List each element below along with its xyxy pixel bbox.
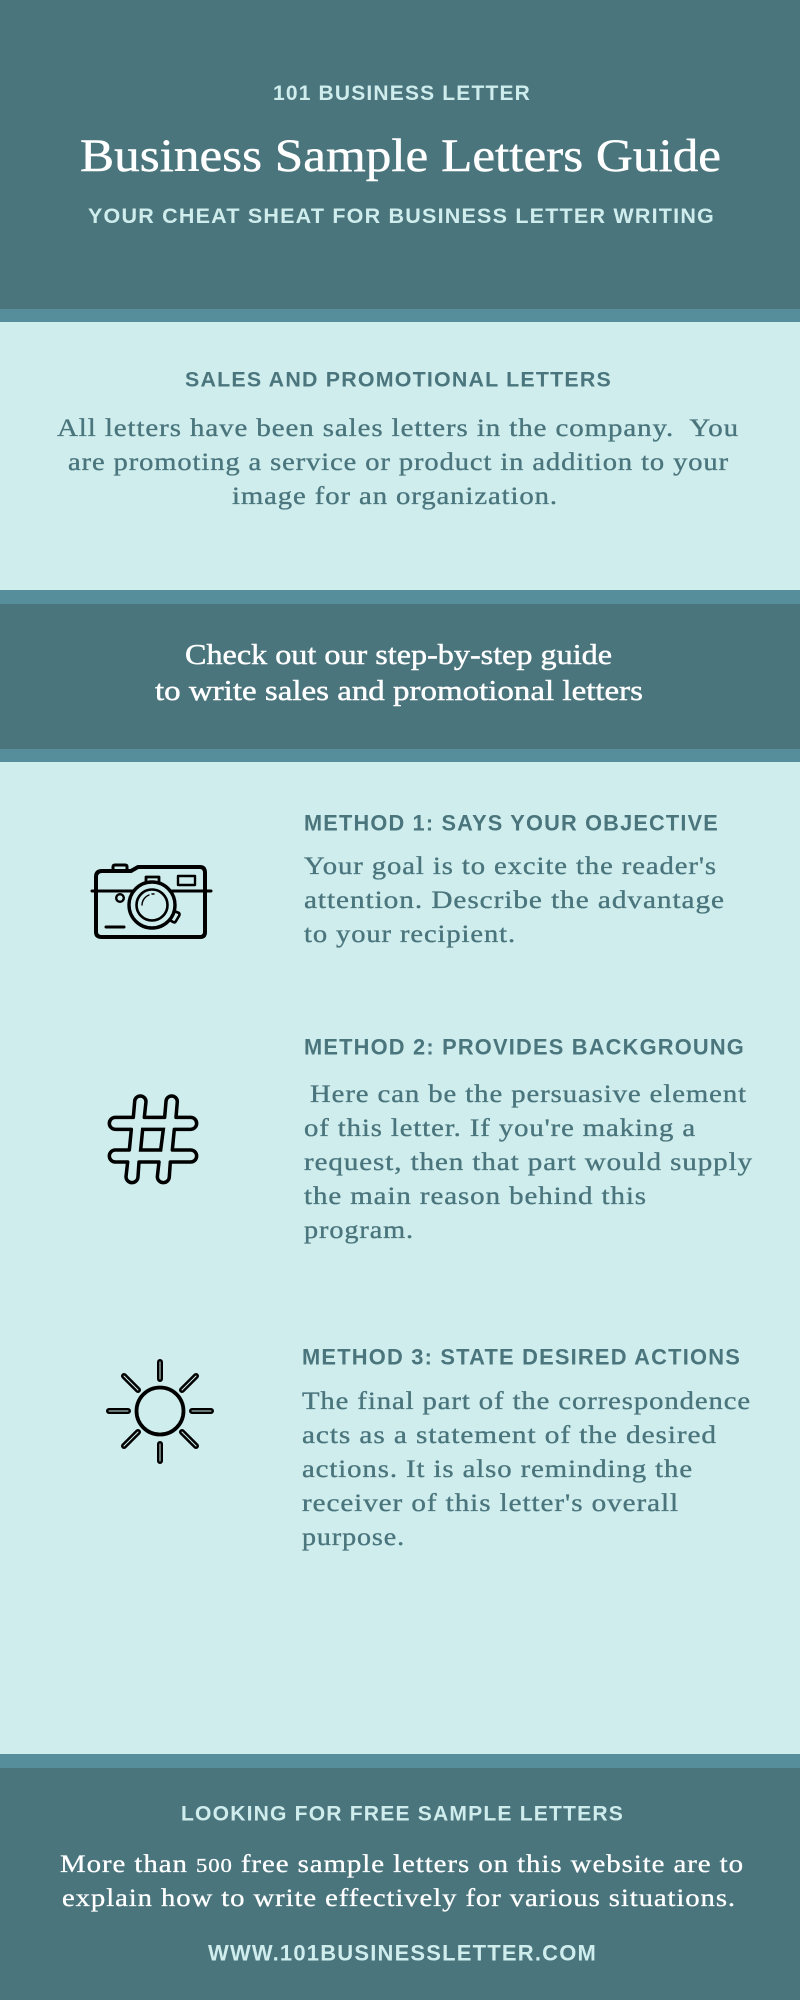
panel: header bbox=[0, 0, 800, 322]
section text: are promoting a service or product in addition to your bbox=[68, 447, 729, 476]
method 1 text: Your goal is to excite the reader's bbox=[304, 851, 717, 880]
section text: All letters have been sales letters in the company. You bbox=[57, 413, 739, 442]
section text: image for an organization. bbox=[232, 481, 558, 510]
footer text: explain how to write effectively for various situations. bbox=[62, 1883, 736, 1912]
icon: hash bbox=[109, 1096, 197, 1183]
method 2 text bbox=[304, 1079, 753, 1244]
footer text: More than 500 free sample letters on this website are to bbox=[60, 1849, 744, 1878]
footer heading: LOOKING FOR FREE SAMPLE LETTERS bbox=[181, 1802, 624, 1826]
method 1 text: attention. Describe the advantage bbox=[304, 885, 725, 914]
method 3 text: acts as a statement of the desired bbox=[302, 1420, 717, 1449]
method 1 text bbox=[304, 851, 725, 948]
call to action text: to write sales and promotional letters bbox=[155, 676, 643, 707]
section text bbox=[57, 413, 739, 510]
subtitle: YOUR CHEAT SHEAT FOR BUSINESS LETTER WRITING bbox=[88, 204, 715, 228]
brand label: 101 BUSINESS LETTER bbox=[273, 81, 531, 105]
method 3 text bbox=[302, 1386, 751, 1551]
panel: sales and promotional letters bbox=[0, 322, 800, 590]
method 2 text: of this letter. If you're making a bbox=[304, 1113, 696, 1142]
method 2 heading: METHOD 2: PROVIDES BACKGROUNG bbox=[304, 1034, 745, 1060]
method 3 heading: METHOD 3: STATE DESIRED ACTIONS bbox=[302, 1344, 741, 1370]
panel: methods bbox=[0, 762, 800, 1754]
icon: camera bbox=[92, 865, 211, 937]
method 3 text: The final part of the correspondence bbox=[302, 1386, 751, 1415]
call to action text: Check out our step-by-step guide bbox=[185, 640, 612, 671]
method 3 text: purpose. bbox=[302, 1522, 405, 1551]
method 3 text: actions. It is also reminding the bbox=[302, 1454, 693, 1483]
method 1 heading: METHOD 1: SAYS YOUR OBJECTIVE bbox=[304, 810, 719, 836]
method 3 text: receiver of this letter's overall bbox=[302, 1488, 679, 1517]
method 2 text: request, then that part would supply bbox=[304, 1147, 753, 1176]
method 2 text: the main reason behind this bbox=[304, 1181, 647, 1210]
footer text bbox=[60, 1849, 744, 1912]
panel: call to action bbox=[0, 590, 800, 762]
title: Business Sample Letters Guide bbox=[80, 130, 721, 182]
method 1 text: to your recipient. bbox=[304, 919, 516, 948]
call to action text bbox=[155, 640, 643, 707]
method 2 text: program. bbox=[304, 1215, 414, 1244]
icon: sun bbox=[109, 1362, 211, 1461]
section heading: SALES AND PROMOTIONAL LETTERS bbox=[185, 368, 612, 392]
website url: WWW.101BUSINESSLETTER.COM bbox=[208, 1940, 597, 1966]
panel: footer bbox=[0, 1754, 800, 2000]
method 2 text: Here can be the persuasive element bbox=[310, 1079, 747, 1108]
